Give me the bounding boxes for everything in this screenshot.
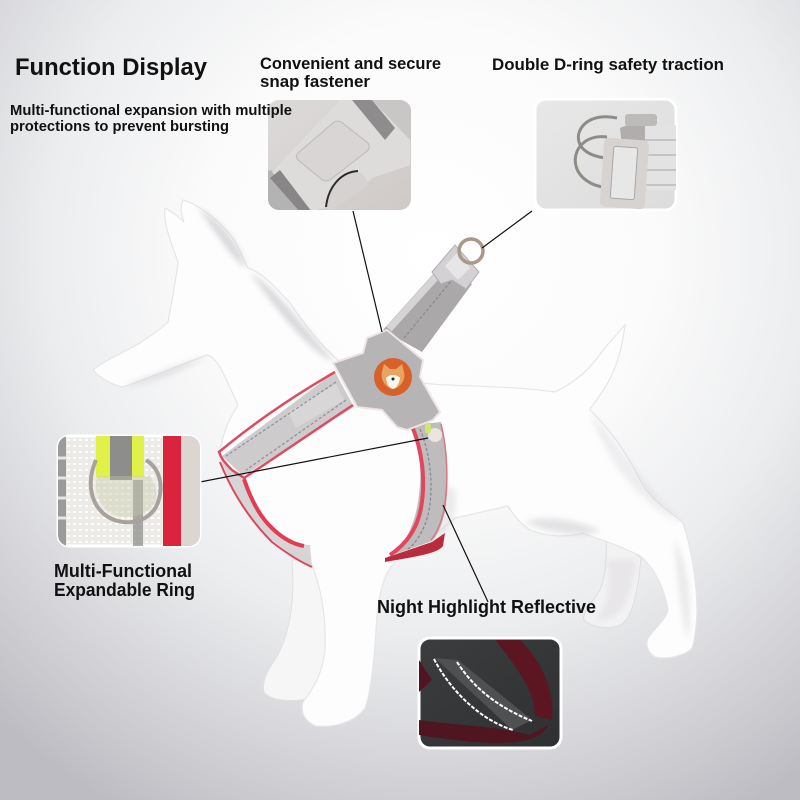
label: snap fastener: Convenient and secure: [260, 54, 441, 73]
harness: [219, 239, 483, 567]
d-ring: [91, 460, 161, 522]
red edge: [163, 436, 181, 546]
panel: expandable ring photo: [58, 436, 200, 546]
red tab: [385, 533, 445, 562]
reflective lines: [434, 659, 513, 730]
label: expandable ring: Multi-Functional: [54, 561, 192, 581]
label: snap fastener: snap fastener: [260, 72, 370, 91]
strap: [435, 658, 532, 730]
text: intro description: Multi-functional expansion with multiple: [10, 103, 292, 119]
label: expandable ring: [54, 561, 195, 600]
dog body: [93, 200, 697, 726]
slider buckle: [432, 245, 479, 289]
slider: [600, 138, 649, 210]
left grey stitching: [58, 436, 66, 546]
panel: night reflective photo: [419, 638, 561, 748]
plate: [333, 330, 440, 430]
chest strap: [219, 372, 354, 478]
title: Function Display: [15, 54, 207, 81]
text: intro description: [10, 103, 292, 135]
ring on strap: [425, 424, 442, 442]
dog mannequin: [93, 200, 697, 726]
webbing: [372, 100, 411, 140]
metal ring: [459, 239, 483, 263]
text: intro description: protections to prevent bursting: [10, 119, 229, 135]
buckle body: [272, 100, 410, 212]
right strap: [385, 422, 448, 562]
clip tab: [327, 172, 367, 207]
panel: snap fastener photo: [268, 100, 411, 210]
far hind leg: [584, 530, 641, 627]
far front leg: [263, 560, 335, 700]
dog shading: [123, 208, 690, 640]
label: double D-ring: Double D-ring safety traction: [492, 55, 724, 74]
center stitching: [133, 480, 143, 546]
upper strap: [383, 262, 472, 352]
panel: double D-ring photo: [535, 99, 680, 210]
label: night reflective: Night Highlight Reflective: [377, 597, 596, 617]
rings: [578, 117, 617, 158]
label: expandable ring: Expandable Ring: [54, 580, 195, 600]
label: snap fastener: [260, 54, 441, 91]
leader lines: [200, 211, 532, 602]
logo: shiba badge: [374, 358, 412, 396]
neon band: [96, 436, 144, 477]
lower loop: [220, 462, 312, 567]
dark red edges: [495, 640, 553, 720]
webbing: [674, 125, 676, 190]
